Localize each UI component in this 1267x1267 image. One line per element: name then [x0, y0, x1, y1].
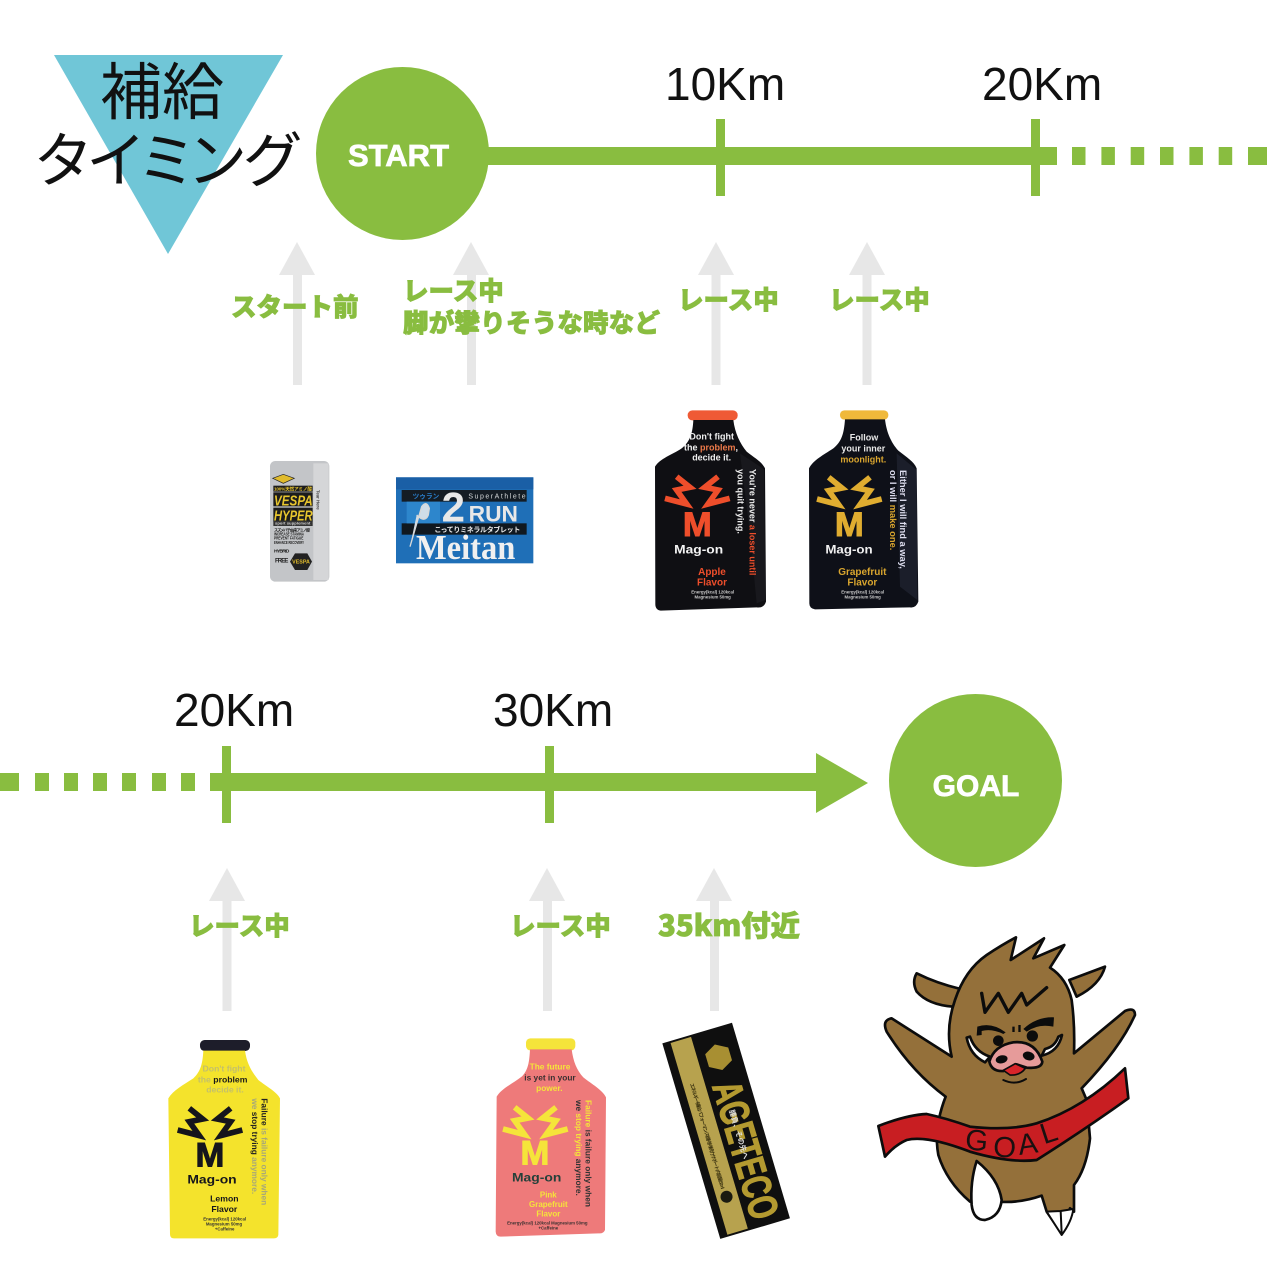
- label: 30Km: 30Km: [493, 684, 613, 736]
- product: Meitan 2RUN: Meitan: [416, 528, 516, 567]
- product: Mag-on pink grapefruit gel: Pink: [540, 1191, 557, 1200]
- label: during race, when legs may cramp: レース中: [403, 271, 504, 308]
- title: timing triangle: 補給: [100, 42, 224, 132]
- product: Mag-on pink grapefruit gel: is yet in your: [524, 1073, 576, 1083]
- illustration: boar mascot breaking the goal tape: [878, 937, 1135, 1235]
- product: Mag-on apple gel: the problem,: [684, 442, 738, 452]
- label: during race 2: レース中: [829, 280, 930, 317]
- product: Mag-on grapefruit gel: your inner: [841, 444, 886, 454]
- arrow: apple gel: [698, 242, 734, 385]
- product: Mag-on apple gel: decide it.: [692, 452, 731, 462]
- boar snout: [989, 1042, 1042, 1071]
- product: Mag-on lemon gel: decide it.: [206, 1085, 244, 1095]
- product: Mag-on apple gel: Energy(kcal) 120kcal: [691, 590, 734, 595]
- product: Mag-on pink grapefruit gel: Energy(kcal) 120kcal Magnesium 50mg: [507, 1221, 588, 1226]
- timeline: start to 20km: [480, 119, 1267, 196]
- goal tape text: GOAL: [964, 1115, 1062, 1165]
- product: Mag-on apple gel: Magnesium 50mg: [695, 595, 731, 600]
- product: Mag-on lemon gel: Failure is failure only when: [260, 1098, 270, 1205]
- product: Mag-on grapefruit gel: [809, 410, 918, 609]
- product: Mag-on pink grapefruit gel: M: [521, 1135, 549, 1173]
- product: Mag-on apple gel: You're never a loser until: [747, 469, 757, 575]
- product: Vespa Hyper: VESPA: [274, 493, 313, 509]
- product: Mag-on grapefruit gel: Energy(kcal) 120kcal: [841, 590, 884, 595]
- product: Vespa Hyper: PREVENT FATIGUE: [274, 536, 303, 541]
- product: Vespa Hyper: VESPA: [292, 560, 310, 566]
- boar ears: [914, 967, 1105, 1007]
- product: Mag-on lemon gel: we stop trying anymore.: [250, 1097, 260, 1194]
- product: Mag-on grapefruit gel: Magnesium 50mg: [845, 595, 881, 600]
- product: Vespa Hyper: sport supplement: [275, 521, 311, 526]
- arrow: stick: [696, 868, 732, 1011]
- label: during race 4: レース中: [510, 906, 611, 943]
- start circle: START: [348, 138, 449, 173]
- product: Mag-on grapefruit gel: or I will make one.: [888, 470, 898, 550]
- start circle: [316, 67, 489, 240]
- product: Mag-on apple gel: [655, 410, 766, 611]
- goal tape: [878, 1068, 1128, 1161]
- product: Mag-on lemon gel: the problem: [198, 1074, 248, 1084]
- product: Mag-on lemon gel: Mag-on: [187, 1173, 237, 1187]
- product: Vespa Hyper: INCREASE STAMINA: [274, 531, 305, 536]
- arrow: mineral tablet: [453, 242, 489, 385]
- product: Vespa Hyper: [270, 461, 329, 582]
- product: Meitan 2RUN: こってりミネラルタブレット: [434, 525, 520, 535]
- product: Vespa Hyper: HYPER: [274, 509, 313, 525]
- product: Mag-on pink grapefruit gel: we stop trying anymore.: [574, 1099, 584, 1196]
- product: Mag-on apple gel: you quit trying.: [735, 469, 745, 534]
- arrow: before start: [279, 242, 315, 385]
- product: Mag-on pink grapefruit gel: Flavor: [536, 1209, 560, 1218]
- boar brows: [977, 1017, 1054, 1036]
- product: Mag-on grapefruit gel: moonlight.: [840, 454, 886, 464]
- product: Meitan 2RUN: [396, 477, 533, 567]
- product: Meitan 2RUN: RUN: [469, 502, 518, 527]
- product: Meitan 2RUN: ツゥラン: [413, 492, 440, 500]
- product: Mag-on grapefruit gel: Mag-on: [825, 543, 873, 557]
- product: Mag-on apple gel: M: [683, 506, 712, 544]
- product: Mag-on pink grapefruit gel: [496, 1038, 606, 1237]
- product: Mag-on grapefruit gel: Grapefruit: [838, 567, 887, 578]
- product: Mag-on pink grapefruit gel: Failure is failure only when: [583, 1100, 593, 1207]
- goal circle: [889, 694, 1062, 867]
- label: 20Km top: 20Km: [982, 58, 1102, 110]
- label: before start: スタート前: [231, 287, 359, 324]
- product: Vespa Hyper: ENHANCE RECOVERY: [274, 540, 304, 545]
- boar eyes: [993, 1030, 1038, 1046]
- product: Meitan 2RUN: 2: [442, 484, 465, 531]
- label: during race 3: レース中: [189, 906, 290, 943]
- arrow: pink gel: [529, 868, 565, 1011]
- arrow: grapefruit gel: [849, 242, 885, 385]
- label: during race, when legs may cramp: [403, 271, 660, 340]
- goal circle: GOAL: [933, 770, 1019, 803]
- product: Vespa Hyper: 100%天然アミノ酸: [274, 485, 312, 492]
- product: Mag-on lemon gel: Energy(kcal) 120kcal: [203, 1217, 246, 1222]
- product: Mag-on lemon gel: [168, 1040, 280, 1238]
- product: Mag-on grapefruit gel: Follow: [850, 433, 878, 443]
- product: Mag-on apple gel: Flavor: [697, 577, 727, 588]
- product: Mag-on lemon gel: M: [196, 1137, 224, 1175]
- title: timing triangle: タイミング: [36, 113, 301, 200]
- label: during race 1: レース中: [678, 280, 779, 317]
- product: Mag-on pink grapefruit gel: Grapefruit: [529, 1200, 568, 1209]
- product: Mag-on lemon gel: Lemon: [210, 1194, 239, 1204]
- product: Vespa Hyper: スズメバチ由来アミノ酸: [274, 526, 310, 532]
- product: Vespa Hyper: FREE: [275, 559, 288, 565]
- product: Mag-on lemon gel: Don't fight: [203, 1063, 246, 1073]
- title: timing triangle: [36, 42, 301, 254]
- product: Mag-on lemon gel: Magnesium 50mg: [206, 1221, 243, 1226]
- product: Vespa Hyper: Tear Here: [316, 490, 321, 510]
- product: Mag-on grapefruit gel: M: [835, 506, 864, 544]
- timeline: 20km to goal: [0, 746, 868, 823]
- product: Mag-on lemon gel: Flavor: [211, 1204, 238, 1214]
- boar left leg: [971, 1161, 1002, 1220]
- product: Vespa Hyper: HYBRID: [274, 549, 290, 555]
- product: Mag-on pink grapefruit gel: +Caffeine: [539, 1225, 559, 1230]
- product: Mag-on apple gel: Apple: [698, 567, 726, 578]
- boar hoof: [1047, 1209, 1073, 1235]
- product: Mag-on pink grapefruit gel: The future: [530, 1061, 571, 1071]
- product: Ageteco stick: 勝負、その先へ: [726, 1108, 752, 1161]
- product: Mag-on apple gel: Mag-on: [674, 543, 723, 557]
- product: Mag-on apple gel: Don't fight: [689, 431, 734, 441]
- product: Ageteco stick: エネルギー補給 パフォーマンス維持 持続力サポート 内容量 50ml: [688, 1082, 726, 1190]
- label: during race, when legs may cramp: 脚が攣りそうな時など: [403, 303, 660, 340]
- boar tusks: [967, 1035, 1062, 1062]
- product: Mag-on lemon gel: +Caffeine: [215, 1226, 235, 1231]
- product: Mag-on grapefruit gel: Either I will find a way,: [898, 470, 908, 569]
- product: Mag-on pink grapefruit gel: power.: [536, 1083, 563, 1093]
- label: 20Km bottom: 20Km: [174, 684, 294, 736]
- boar nostrils and mouth: [995, 1050, 1036, 1083]
- boar body: [885, 937, 1135, 1233]
- product: Mag-on grapefruit gel: Flavor: [847, 577, 877, 588]
- label: 10Km: 10Km: [665, 58, 785, 110]
- product: Meitan 2RUN: SuperAthlete: [468, 494, 526, 501]
- product: Ageteco stick: [662, 1023, 791, 1239]
- label: near 35km: 35km付近: [658, 903, 800, 945]
- boar hair: [982, 988, 1047, 1012]
- arrow: lemon gel: [209, 868, 245, 1011]
- product: Mag-on pink grapefruit gel: Mag-on: [512, 1171, 561, 1185]
